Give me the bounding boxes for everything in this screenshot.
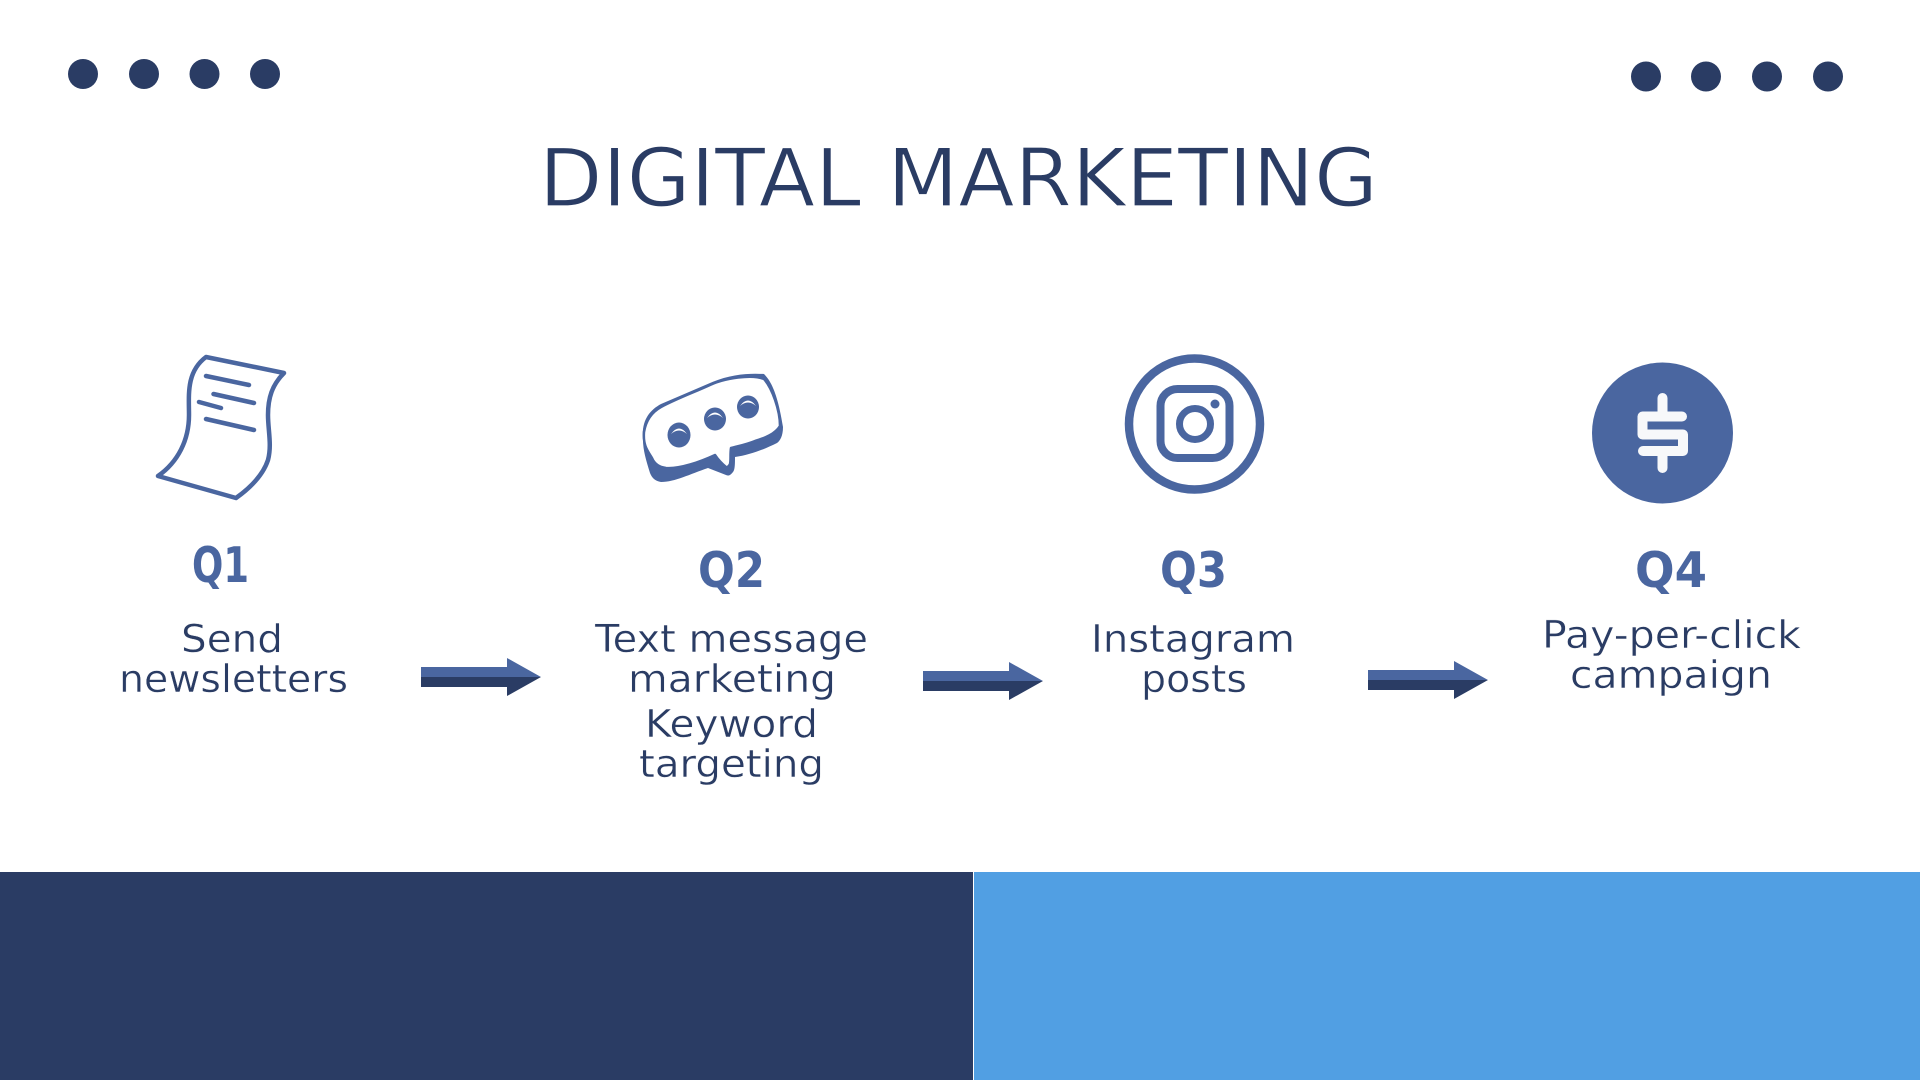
arrow: Q3 to Q4: [1368, 661, 1488, 699]
arrow: Q2 to Q3: [923, 662, 1043, 700]
text: Q2 description: marketing: [628, 657, 836, 701]
text: Q3 description: Instagram: [1091, 617, 1295, 661]
footer band: blue: [974, 872, 1920, 1080]
decorative dots: top left: [68, 59, 280, 89]
heading: Q1: Q1: [192, 537, 249, 594]
heading: Q4: Q4: [1635, 542, 1707, 599]
text: Q1 description: Send: [181, 617, 283, 661]
panel: Q4: [1542, 362, 1801, 697]
text: Q2 description: targeting: [639, 742, 824, 786]
panel: Q1: [119, 357, 348, 701]
title: DIGITAL MARKETING: [539, 132, 1378, 225]
icon: Instagram: [1129, 358, 1260, 490]
panel: Q2: [594, 374, 868, 786]
text: Q2 description: Keyword: [645, 702, 818, 746]
text: Q2 description: Text message: [594, 617, 868, 661]
text: Q4 description: campaign: [1570, 653, 1772, 697]
text: Q1 description: newsletters: [119, 657, 348, 701]
icon: newsletter page: [158, 357, 284, 498]
arrow: Q1 to Q2: [421, 658, 541, 696]
text: Q3 description: posts: [1141, 657, 1247, 701]
text: Q4 description: Pay-per-click: [1542, 613, 1801, 657]
panel: Q3: [1091, 358, 1295, 701]
heading: Q2: Q2: [698, 542, 765, 599]
footer band: navy: [0, 872, 973, 1080]
heading: Q3: Q3: [1160, 542, 1227, 599]
icon: chat bubble: [643, 374, 783, 482]
icon: dollar coin: [1592, 362, 1733, 504]
decorative dots: top right: [1631, 62, 1843, 92]
